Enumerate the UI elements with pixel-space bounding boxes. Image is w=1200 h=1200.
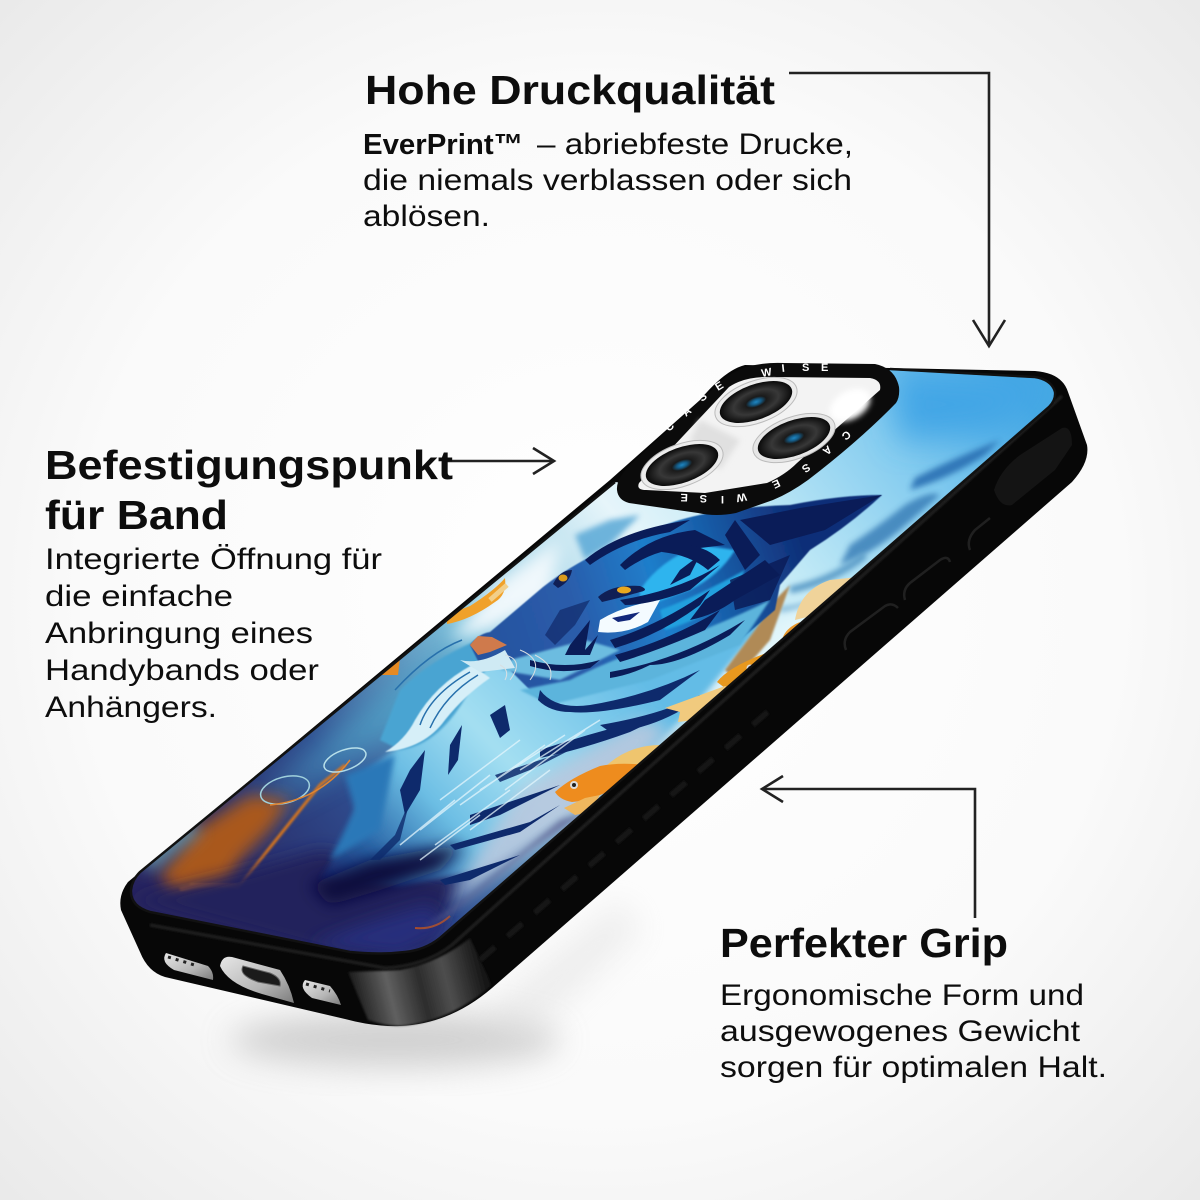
nose bbox=[470, 636, 507, 655]
orange clouds bbox=[145, 743, 369, 895]
goldfish upper left bbox=[447, 578, 505, 624]
text block: strap point bbox=[45, 442, 453, 724]
cyan forehead patch bbox=[640, 545, 735, 610]
camera bump bbox=[617, 362, 899, 515]
camera window bbox=[638, 377, 880, 493]
body stripes bbox=[370, 670, 700, 885]
back edge rim bbox=[131, 369, 1055, 954]
left blue shoulder bbox=[330, 755, 395, 860]
side buttons bbox=[845, 428, 1072, 650]
body bbox=[45, 543, 382, 724]
heading: für Band bbox=[45, 492, 228, 538]
textured grip side bbox=[480, 710, 770, 960]
lavender belly bbox=[450, 720, 670, 905]
head stripes bbox=[530, 495, 882, 678]
neck warm edge bbox=[725, 585, 790, 680]
phone shadow bbox=[230, 900, 640, 1068]
white face markings bbox=[598, 600, 660, 633]
body: die niemals verblassen oder sich bbox=[363, 164, 852, 197]
body: ausgewogenes Gewicht bbox=[720, 1015, 1081, 1048]
body bbox=[720, 979, 1107, 1084]
lens left bbox=[634, 431, 730, 499]
charging port bbox=[220, 957, 294, 1003]
goldfish middle bbox=[665, 577, 858, 722]
fur highlights bbox=[400, 720, 600, 860]
lower face light fur bbox=[520, 600, 770, 705]
glossy bottom corner bbox=[348, 938, 492, 1026]
body: Handybands oder bbox=[45, 654, 319, 687]
heading: Befestigungspunkt bbox=[45, 442, 453, 488]
body: sorgen für optimalen Halt. bbox=[720, 1051, 1107, 1084]
camera ring bbox=[617, 363, 899, 515]
text block: print quality bbox=[363, 67, 853, 233]
lens top bbox=[708, 368, 804, 436]
heading: Perfekter Grip bbox=[720, 920, 1008, 966]
arrow: grip bbox=[762, 776, 975, 918]
back artwork: tiger bbox=[132, 370, 1054, 952]
tiger head bbox=[470, 495, 882, 700]
body: – abriebfeste Drucke, bbox=[537, 128, 853, 161]
arrow: print quality bbox=[789, 73, 1005, 346]
phone case body bbox=[120, 365, 1087, 1026]
navy bottom clouds bbox=[158, 846, 462, 952]
left side water bbox=[260, 540, 564, 808]
phone bbox=[100, 340, 1100, 1026]
brand ring bottom: CASEWISE bbox=[680, 428, 853, 505]
body: die einfache bbox=[45, 580, 233, 613]
brand ring top: CASE WISE bbox=[663, 362, 828, 434]
bottom speaker left bbox=[164, 953, 213, 980]
heading: Hohe Druckqualität bbox=[365, 67, 775, 113]
tiger body bbox=[320, 610, 775, 885]
heading bbox=[45, 442, 453, 538]
whiskers bbox=[500, 650, 551, 680]
body bbox=[363, 128, 853, 233]
sky clouds bbox=[575, 370, 1050, 700]
body: Anbringung eines bbox=[45, 617, 313, 650]
body: ablösen. bbox=[363, 200, 490, 233]
bottom speaker right bbox=[303, 980, 341, 1005]
shadow under chest bbox=[310, 845, 465, 905]
text block: grip bbox=[720, 920, 1107, 1084]
eyes bbox=[553, 570, 645, 602]
water beard bbox=[380, 640, 490, 752]
lens right bbox=[746, 404, 842, 472]
body: Ergonomische Form und bbox=[720, 979, 1084, 1012]
body: EverPrint™ bbox=[363, 129, 523, 161]
arrow: strap point bbox=[446, 448, 554, 474]
body: Integrierte Öffnung für bbox=[45, 543, 382, 576]
goldfish lower bbox=[555, 745, 660, 815]
case rim highlight bbox=[150, 396, 1062, 968]
body: Anhängers. bbox=[45, 691, 217, 724]
